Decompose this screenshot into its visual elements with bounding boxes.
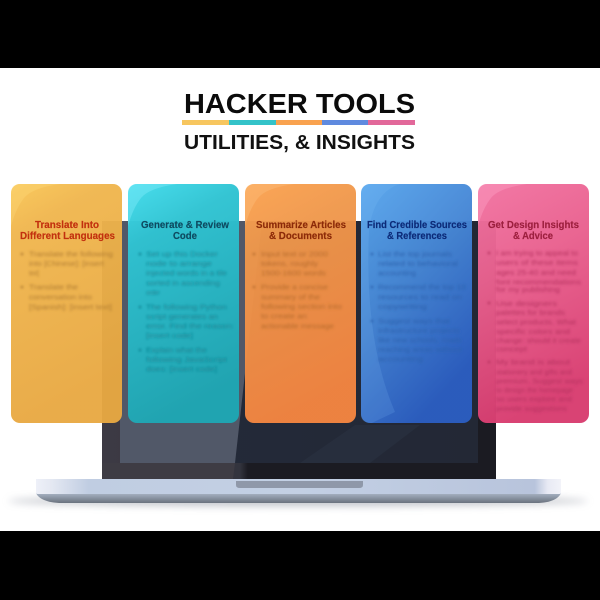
card heading: Generate & Review [141, 220, 229, 231]
card bullet list: into [Chinese]: [insert [29, 259, 105, 268]
card heading [367, 220, 467, 242]
card bullet list [21, 250, 113, 312]
card bullet list: resources to read on [378, 292, 462, 302]
card bullet list: related to behavioral [378, 259, 458, 268]
card heading [141, 220, 229, 242]
card bullet list: Input text or 2000 [261, 250, 328, 258]
card bullet list: accounting [378, 354, 423, 364]
card bullet list: 1500-1600 words [261, 268, 326, 278]
card bullet list: injected words in a tile [146, 268, 227, 278]
card heading: Code [173, 231, 197, 242]
laptop screen [102, 221, 496, 479]
card bullet list: palettes for brands [496, 308, 565, 317]
card bullet list: does: [insert code] [146, 364, 217, 374]
card bullet list: to create an [261, 312, 307, 320]
card bullet list: Translate the following [29, 250, 113, 258]
card bullet list: Suggest ways that [378, 316, 451, 326]
card bullet list: stationery and gifts and [496, 368, 572, 376]
card bullet list [139, 250, 234, 374]
card bullet list: Explain what the [146, 346, 207, 354]
panel: code [128, 184, 239, 423]
card bullet list: My brand is about [496, 358, 571, 366]
bottom black band [0, 531, 600, 600]
card heading: Summarize Articles [256, 220, 346, 231]
card heading [256, 220, 346, 242]
card bullet list: actionable message [261, 322, 334, 330]
laptop shadow [8, 496, 588, 506]
card bullet list: tokens, roughly [261, 259, 318, 268]
trackpad notch [236, 481, 363, 488]
card bullet list: ages 25-40 and need [496, 268, 576, 277]
card bullet list: I am trying to appeal to [496, 248, 578, 258]
card bullet list: following section into [261, 302, 342, 311]
card bullet list: List the top journals [378, 250, 452, 258]
card bullet list: Translate the [29, 282, 78, 292]
card bullet list: select products. What [496, 318, 577, 326]
card bullet list: Provide a concise [261, 282, 328, 292]
card bullet list: change: should it create [496, 336, 581, 345]
card bullet list: provide suggestions [496, 404, 567, 413]
card heading: & References [387, 231, 447, 242]
card bullet list: concept [496, 344, 528, 354]
card bullet list: font recommendations [496, 278, 581, 286]
card bullet list: node to arrange [146, 259, 212, 268]
card bullet list: [Spanish]: [insert text] [29, 302, 112, 312]
card heading: & Advice [513, 231, 553, 242]
top black band [0, 0, 600, 68]
panel: translate [11, 184, 122, 423]
panel: sources [361, 184, 472, 423]
card heading: Find Credible Sources [367, 220, 467, 231]
card bullet list: premium. Suggest ways [496, 376, 583, 386]
card heading [488, 220, 579, 242]
heading: Hacker Tools: HACKER TOOLS [184, 88, 415, 119]
card bullet list: text] [29, 268, 39, 278]
card bullet list: Set up this Docker [146, 250, 219, 258]
subheading: UTILITIES, & INSIGHTS [184, 132, 415, 154]
card bullet list: reaching areas without [378, 345, 463, 354]
card bullet list: [insert code] [146, 331, 193, 340]
card bullet list: sorted in ascending [146, 278, 220, 288]
card bullet list: The following Python [146, 302, 227, 312]
card bullet list: infrastructure projects [378, 326, 460, 335]
card bullet list [371, 250, 466, 364]
panel: summarize [245, 184, 356, 423]
card bullet list: Use designers [496, 299, 557, 308]
card bullet list: order [146, 288, 160, 297]
card bullet list: like new schools, roads [378, 336, 462, 344]
card bullet list: summary of the [261, 292, 320, 302]
card bullet list: specific colors and [496, 327, 570, 336]
card bullet list: following JavaScript [146, 355, 228, 364]
card bullet list: accounting [378, 268, 416, 278]
panel: design [478, 184, 589, 423]
card bullet list [488, 248, 583, 413]
laptop illustration [8, 221, 588, 506]
title block [182, 88, 415, 154]
tricolour rule under heading [182, 120, 415, 125]
card heading: & Documents [269, 231, 332, 242]
card bullet list: error. Find the reason: [146, 322, 234, 330]
card bullet list: for my publishing [496, 285, 560, 294]
card heading [20, 220, 115, 242]
card bullet list: Recommend the top 10 [378, 282, 466, 292]
laptop base [36, 479, 561, 503]
card bullet list: so users explore and [496, 394, 572, 404]
card bullet list: conversation into [29, 292, 92, 302]
card bullet list: script generates an [146, 312, 218, 321]
card bullet list [253, 250, 342, 330]
card bullet list: to design the homepage [496, 386, 573, 394]
card heading: Get Design Insights [488, 220, 579, 231]
card heading: Different Languages [20, 231, 115, 242]
card bullet list: copywriting [378, 302, 427, 311]
card bullet list: users of these items [496, 258, 578, 267]
card heading: Translate Into [35, 220, 99, 231]
